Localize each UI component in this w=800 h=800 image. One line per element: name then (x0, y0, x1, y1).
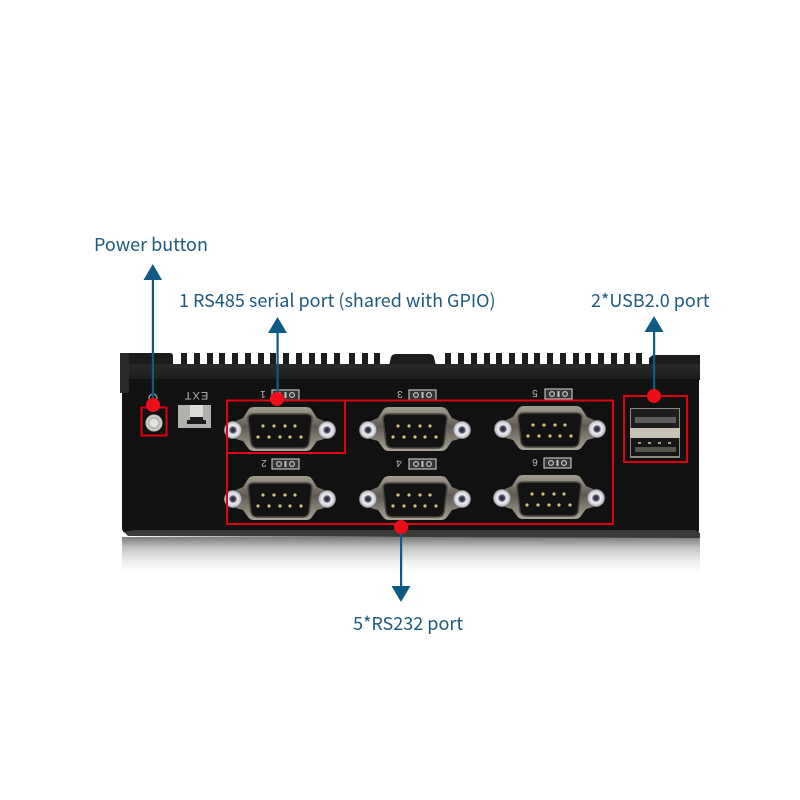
device enclosure (120, 353, 700, 538)
callout box: RS232 ports (227, 400, 613, 524)
port labels (printed upside-down): 2 (261, 457, 267, 468)
port labels (printed upside-down) (260, 387, 572, 469)
arrow: USB ports (644, 316, 664, 403)
port labels (printed upside-down): 5 (532, 387, 538, 398)
label: power button: Power button (94, 231, 208, 257)
EXT label: EXT (184, 389, 208, 401)
arrow: power button (144, 264, 162, 412)
power symbol icon (149, 394, 157, 402)
arrow: RS232 ports (392, 520, 410, 602)
serial connectors (224, 406, 606, 520)
dual USB ports (630, 408, 680, 458)
label: USB: 2*USB2.0 port (591, 287, 710, 313)
port labels (printed upside-down): 6 (532, 456, 538, 467)
port labels (printed upside-down): 4 (396, 457, 402, 468)
callout box: USB ports (624, 396, 687, 462)
label: RS232: 5*RS232 port (353, 610, 463, 636)
port labels (printed upside-down): 3 (397, 388, 403, 399)
port labels (printed upside-down): 1 (260, 388, 266, 399)
power button (146, 414, 162, 432)
cooling fins (128, 353, 700, 366)
EXT port (178, 405, 211, 428)
top face (122, 364, 700, 380)
callout box: power button (142, 408, 166, 436)
front face (122, 379, 699, 533)
lower edge (124, 530, 700, 538)
arrow: RS485 port (268, 317, 287, 406)
device reflection (122, 537, 700, 573)
callout box: RS485 port (227, 400, 345, 453)
label: RS485: 1 RS485 serial port (shared with GPIO) (179, 287, 496, 313)
